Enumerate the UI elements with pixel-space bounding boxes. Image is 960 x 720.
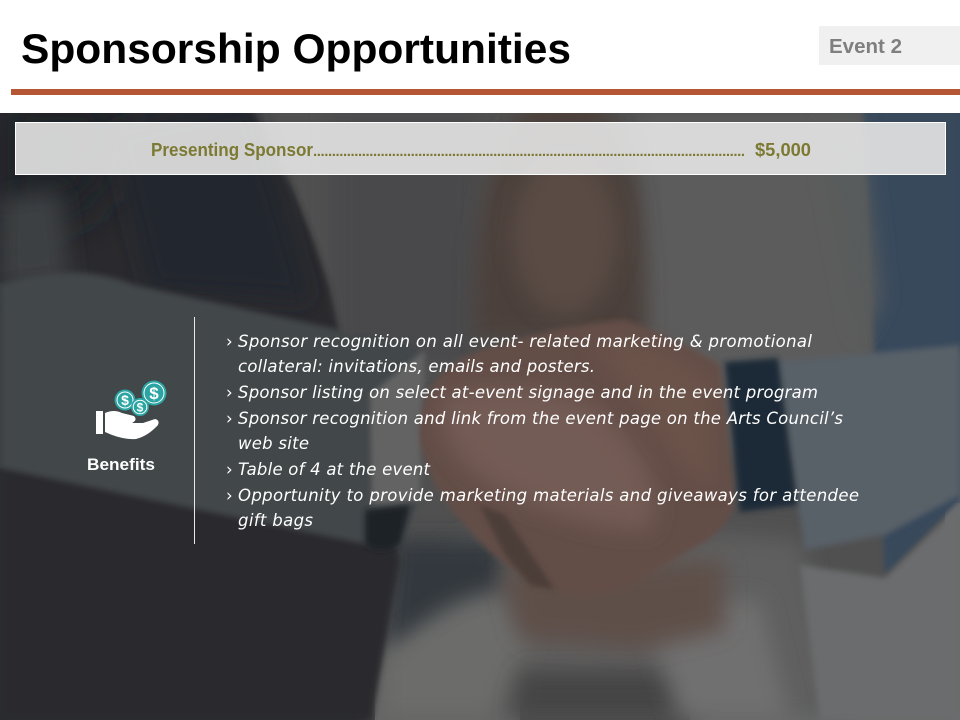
edge underlays so blur does not fade at the frame edge xyxy=(0,680,375,720)
benefits list: Sponsor listing on select at-event signage and in the event program xyxy=(238,383,818,402)
presenting sponsor banner xyxy=(16,122,946,174)
woman's blouse xyxy=(370,520,850,720)
benefits list: › xyxy=(226,460,233,479)
benefits list xyxy=(226,332,859,530)
presenting sponsor banner: $5,000 xyxy=(755,140,811,160)
event tag: Event 2 xyxy=(829,36,902,58)
icon: coin left: $ xyxy=(121,392,129,408)
left suit body xyxy=(0,90,400,720)
benefits list: Table of 4 at the event xyxy=(238,460,431,479)
hands xyxy=(420,320,735,593)
benefits list: › xyxy=(226,486,233,505)
presenting sponsor banner: Presenting Sponsor xyxy=(151,140,313,160)
benefits list: gift bags xyxy=(238,511,313,530)
right lower shirt xyxy=(800,505,960,720)
woman in background xyxy=(475,90,645,340)
left sleeve xyxy=(0,272,420,545)
right jacket xyxy=(862,90,960,575)
benefits list: web site xyxy=(238,434,309,453)
right sleeve xyxy=(775,345,960,550)
benefits list: collateral: invitations, emails and posters. xyxy=(238,357,595,376)
benefits list: Sponsor recognition on all event- related marketing & promotional xyxy=(238,332,812,351)
right dark cuff xyxy=(725,358,797,512)
header rule xyxy=(11,89,960,95)
icon: coin middle: $ xyxy=(137,400,144,414)
white header band xyxy=(0,0,960,113)
icon: cuff xyxy=(96,411,103,434)
shirt cuff left xyxy=(370,350,425,505)
benefits list: › xyxy=(226,409,233,428)
benefits label: Benefits xyxy=(87,455,155,474)
benefits list: Opportunity to provide marketing materials and giveaways for attendee xyxy=(238,486,859,505)
presenting sponsor banner: ................................................................................................................... xyxy=(313,143,745,160)
title: Sponsorship Opportunities xyxy=(21,25,571,72)
benefits icon: hand holding coins xyxy=(96,380,166,439)
icon: coin right: $ xyxy=(149,384,159,403)
dark gap below the cuff xyxy=(365,505,410,550)
event tag xyxy=(819,26,960,65)
forearm xyxy=(500,560,725,650)
benefits list: › xyxy=(226,332,233,351)
vertical divider xyxy=(194,317,195,544)
icon: hand xyxy=(105,411,159,439)
benefits list: › xyxy=(226,383,233,402)
benefits list: Sponsor recognition and link from the event page on the Arts Council’s xyxy=(238,409,843,428)
